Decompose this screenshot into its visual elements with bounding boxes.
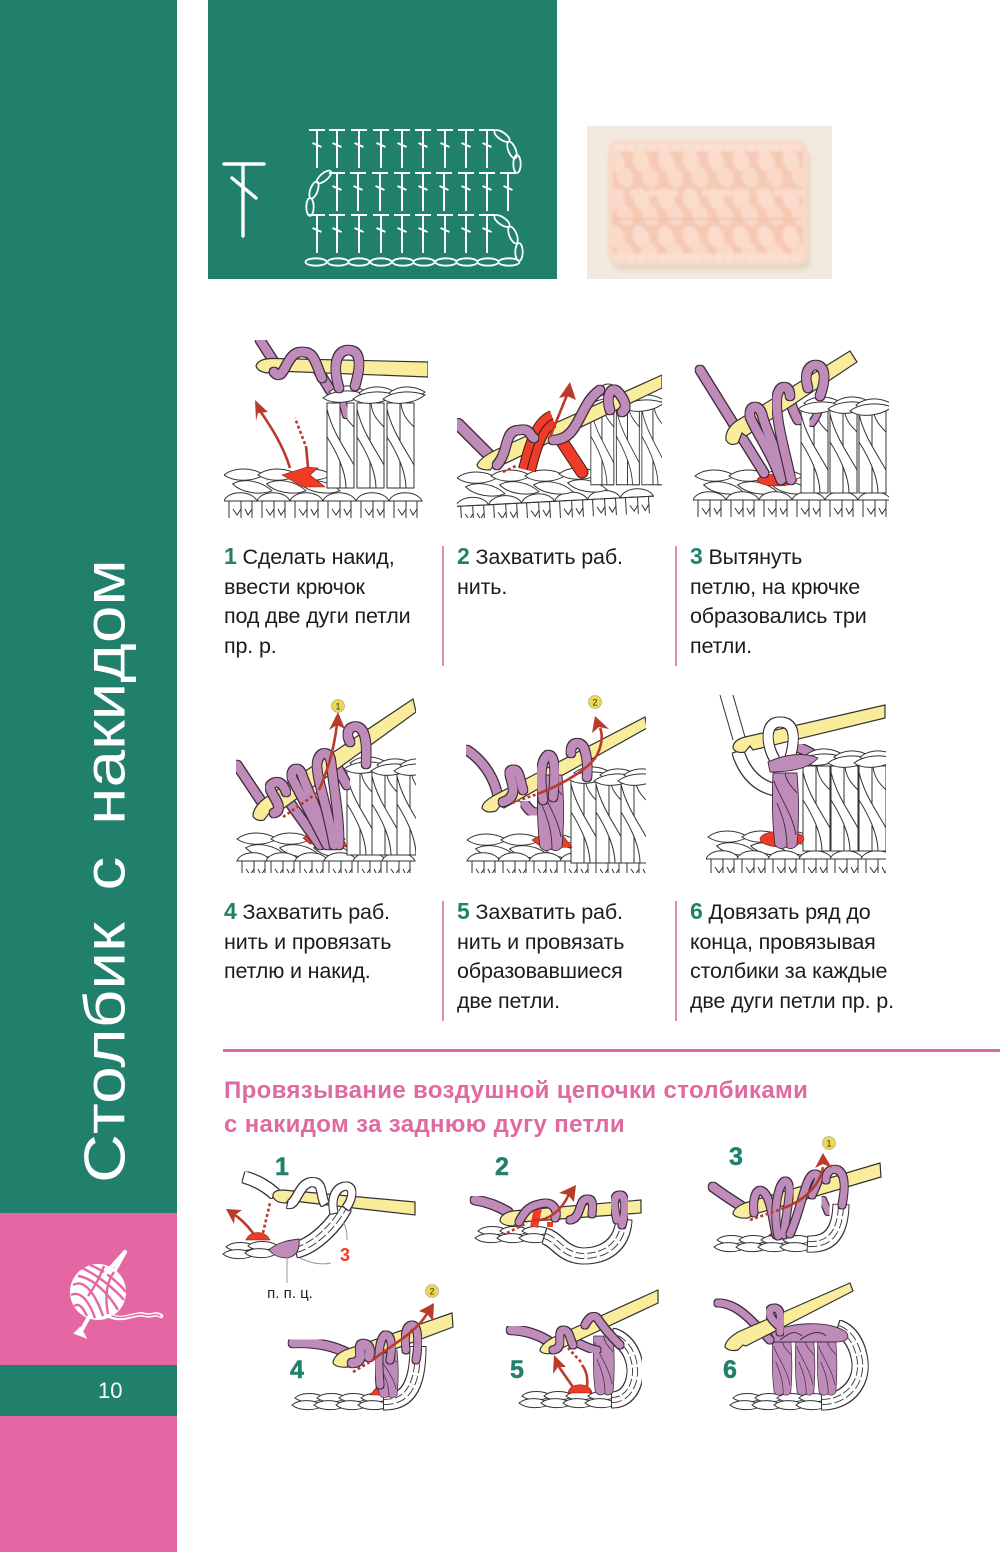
divider (675, 901, 677, 1021)
step 2 illustration (455, 375, 665, 523)
step 2 caption: нить. (457, 575, 507, 599)
step 6 caption: 6 Довязать ряд до (690, 898, 871, 924)
lower step 1 illustration (223, 1153, 415, 1302)
step 3 illustration (693, 351, 892, 517)
lower pink block (0, 1416, 177, 1552)
lower step 3 illustration (713, 1136, 881, 1252)
section heading: с накидом за заднюю дугу петли (224, 1111, 625, 1138)
step 1 illustration (224, 340, 428, 518)
green chart panel (208, 0, 557, 279)
lower step 3 illustration: 1 (826, 1138, 832, 1148)
step 1 caption: пр. р. (224, 634, 277, 658)
step 6 caption: столбики за каждые (690, 959, 887, 983)
step 6 caption: две дуги петли пр. р. (690, 989, 894, 1013)
section rule (223, 1049, 1000, 1052)
page number band: 10 (98, 1378, 122, 1403)
step 4 caption (224, 898, 391, 983)
page number band (0, 1365, 177, 1416)
step 4 illustration: 1 (335, 702, 341, 712)
lower step 3 number: 3 (729, 1143, 743, 1171)
step 5 illustration (467, 696, 660, 878)
lower step 4 illustration (290, 1284, 453, 1410)
step 6 caption: конца, провязывая (690, 930, 876, 954)
sidebar (0, 0, 177, 1552)
icon: yarn ball with hook (70, 1252, 161, 1336)
lower step 5 illustration (510, 1290, 658, 1408)
section heading: Провязывание воздушной цепочки столбиками (224, 1077, 808, 1104)
step 6 caption (690, 898, 894, 1013)
step 3 caption: петлю, на крючке (690, 575, 860, 599)
step 5 illustration: 2 (592, 698, 598, 708)
step 4 caption: петлю и накид. (224, 959, 371, 983)
step 3 caption: образовались три (690, 604, 867, 628)
step 1 caption: ввести крючок (224, 575, 365, 599)
lower step 4 illustration: 2 (429, 1286, 435, 1296)
lower step 2 illustration (475, 1153, 641, 1256)
step 1 caption: 1 Сделать накид, (224, 543, 395, 569)
step 1 caption: под две дуги петли (224, 604, 411, 628)
step 4 caption: нить и провязать (224, 930, 391, 954)
all drawn artwork (70, 126, 889, 1410)
step 2 caption (457, 543, 623, 599)
chart: double crochet symbol (224, 164, 264, 236)
step 6 illustration (706, 695, 896, 876)
step 2 caption: 2 Захватить раб. (457, 543, 623, 569)
lower step 6 number: 6 (723, 1356, 737, 1384)
chart: stitch diagram (306, 128, 523, 266)
pink block with yarn icon (0, 1213, 177, 1365)
step 5 caption (457, 898, 624, 1013)
step 4 illustration (236, 698, 416, 873)
lower step 6 illustration (718, 1283, 860, 1410)
step 5 caption: образовавшиеся (457, 959, 623, 983)
divider (675, 546, 677, 666)
label: 3: 3 (340, 1245, 350, 1265)
photo: crocheted swatch (587, 126, 832, 279)
step 5 caption: 5 Захватить раб. (457, 898, 623, 924)
section heading (224, 1077, 808, 1138)
step 3 caption: 3 Вытянуть (690, 543, 802, 569)
step 3 caption (690, 543, 867, 658)
lower step 1 number: 1 (275, 1153, 289, 1181)
step 5 caption: две петли. (457, 989, 560, 1013)
lower step 5 number: 5 (510, 1356, 524, 1384)
divider (442, 546, 444, 666)
lower step 4 number: 4 (290, 1356, 304, 1384)
lower step 2 number: 2 (495, 1153, 509, 1181)
label: п. п. ц.: п. п. ц. (267, 1285, 313, 1302)
divider (442, 901, 444, 1021)
step 1 caption (224, 543, 411, 658)
sidebar title: Столбик с накидом (74, 559, 137, 1183)
step 5 caption: нить и провязать (457, 930, 624, 954)
step 3 caption: петли. (690, 634, 752, 658)
step 4 caption: 4 Захватить раб. (224, 898, 390, 924)
